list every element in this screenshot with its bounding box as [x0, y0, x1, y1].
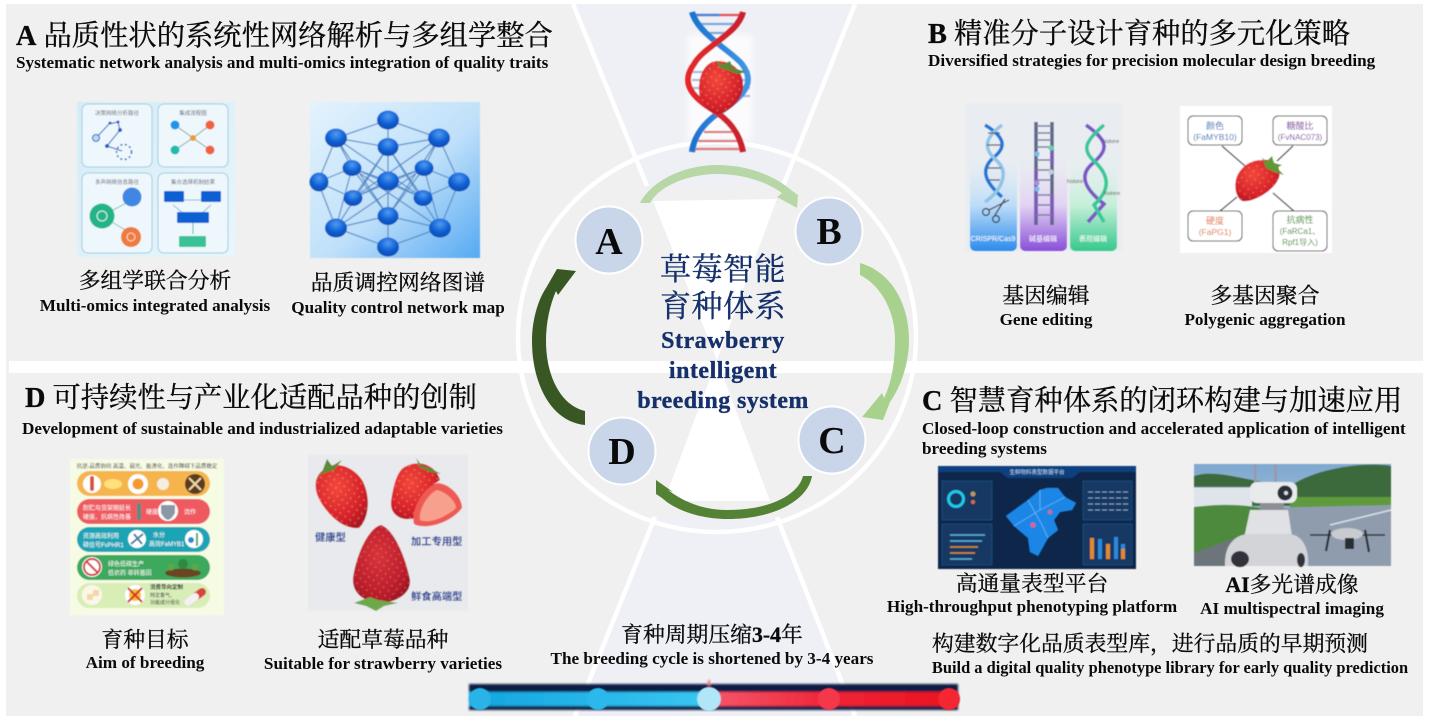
figure: polygenic aggregation: (FaMYB10) [1193, 132, 1237, 142]
node D: D [608, 431, 636, 473]
heading C: C 智慧育种体系的闭环构建与加速应用 [922, 385, 1402, 417]
node B [796, 198, 862, 264]
heading C [922, 385, 1406, 458]
panel D: sustainable varieties [22, 382, 503, 673]
heading B: B 精准分子设计育种的多元化策略 [928, 18, 1350, 50]
caption: gene editing [1000, 284, 1093, 329]
figure: gene editing: histone [1104, 191, 1120, 197]
figure: gene editing: histone [1067, 179, 1083, 185]
figure: strawberry varieties: 健康型 [315, 531, 346, 544]
figure: breeding aims: 抗逆-品质协同 高温、弱光、盐渍化、连作障碍下品质稳定 [77, 462, 218, 470]
caption: network map: Quality control network map [291, 298, 505, 317]
caption: gene editing: Gene editing [1000, 310, 1093, 329]
figure: strawberry varieties [308, 455, 468, 611]
caption: phenotyping platform: High-throughput phenotyping platform [887, 597, 1177, 616]
figure: breeding aims: 耐贮与货架期延长 [83, 504, 131, 512]
figure: polygenic aggregation: (FvNAC073) [1278, 133, 1323, 142]
text: digital phenotype library [932, 632, 1408, 677]
caption: AI imaging: AI多光谱成像 [1225, 573, 1359, 597]
node B: B [816, 211, 842, 253]
figure: breeding aims: 高效FaMYB1 [149, 540, 185, 548]
figure: breeding aims [70, 459, 224, 615]
heading C: breeding systems [922, 439, 1047, 458]
caption: network map: 品质调控网络图谱 [311, 271, 485, 295]
caption: polygenic aggregation: Polygenic aggregation [1184, 310, 1346, 329]
figure: strawberry varieties: 加工专用型 [411, 535, 462, 548]
figure: gene editing: 碱基编辑 [1029, 234, 1057, 243]
figure: gene editing: histone [1103, 139, 1119, 145]
heading B [928, 18, 1376, 70]
heading D: D 可持续性与产业化适配品种的创制 [25, 382, 477, 414]
figure: phenotyping dashboard: 生鲜物料表型数据平台 [1009, 468, 1065, 476]
figure: strawberry varieties: 鲜食高端型 [411, 590, 462, 603]
heading D: Development of sustainable and industrialized adaptable varieties [22, 419, 503, 438]
arrow: A to B [640, 165, 798, 208]
heading B: Diversified strategies for precision molecular design breeding [928, 51, 1376, 70]
panel C: closed-loop smart breeding [887, 385, 1408, 677]
heading A: Systematic network analysis and multi-omics integration of quality traits [16, 53, 549, 72]
center title: Strawberry [661, 328, 785, 354]
figure: phenotyping dashboard [938, 466, 1136, 569]
figure: gene editing [965, 103, 1122, 251]
arrow: B to C [860, 263, 909, 420]
center title: 草莓智能 [660, 252, 786, 287]
caption: AI imaging [1200, 573, 1384, 618]
text: breeding cycle: The breeding cycle is shortened by 3-4 years [551, 649, 874, 668]
figure: multi-omics panels [77, 102, 235, 257]
figure: breeding aims: 消费导向定制 [150, 583, 184, 591]
text: digital phenotype library: 构建数字化品质表型库，进行品质的早期预测 [932, 632, 1368, 657]
figure: breeding aims: 特定香气、 [150, 592, 175, 599]
figure: multi-omics panels: 决策网络分析路径 [95, 109, 139, 117]
caption: suitable varieties [264, 628, 502, 673]
center title [637, 252, 809, 414]
heading D [22, 382, 503, 438]
node C [798, 406, 866, 474]
figure: gene editing: CRISPR/Cas9 [971, 236, 1015, 243]
center title: 育种体系 [660, 289, 786, 324]
caption: suitable varieties: 适配草莓品种 [318, 628, 449, 652]
node A [576, 206, 642, 274]
node C: C [818, 420, 846, 462]
figure: breeding aims: 磷信号FvPHR1 [83, 541, 124, 549]
panel A: systematic network analysis [16, 20, 553, 317]
caption: aim of breeding [86, 628, 205, 672]
arrow: C to D [656, 476, 812, 519]
caption: AI imaging: AI multispectral imaging [1200, 599, 1384, 618]
figure: polygenic aggregation: (FaPG1) [1199, 227, 1231, 237]
figure: multi-omics panels: 多声网络信息路径 [95, 178, 139, 186]
figure: polygenic aggregation: 颜色 [1206, 120, 1224, 131]
figure: polygenic aggregation: 硬度 [1206, 215, 1224, 226]
arrow: D to A [532, 269, 585, 425]
center title: breeding system [637, 388, 809, 414]
figure: breeding aims: 低农药 非转基因 [108, 569, 152, 577]
progress bar: breeding timeline [469, 680, 960, 711]
center title: intelligent [669, 358, 777, 384]
figure: polygenic aggregation: 抗病性 [1286, 214, 1314, 225]
figure: polygenic aggregation: Rpf1导入) [1282, 238, 1318, 247]
caption: network map [291, 271, 505, 317]
figure: breeding aims: 绿色低碳生产 [108, 560, 144, 568]
figure: breeding aims: 硬度 [146, 508, 158, 516]
caption: multi-omics: Multi-omics integrated analysis [40, 296, 271, 315]
icon: DNA helix with strawberry [688, 12, 752, 152]
caption: gene editing: 基因编辑 [1002, 284, 1090, 308]
figure: multi-omics panels: 集合选择机制结果 [171, 178, 215, 186]
heading A [16, 20, 553, 72]
heading A: A 品质性状的系统性网络解析与多组学整合 [16, 20, 553, 52]
figure: AI multispectral robot [1194, 464, 1391, 567]
figure: breeding aims: 流作 [184, 508, 196, 516]
node A: A [595, 221, 623, 263]
caption: aim of breeding: 育种目标 [101, 628, 190, 652]
caption: multi-omics: 多组学联合分析 [79, 269, 231, 293]
figure: polygenic aggregation: 糖酸比 [1286, 120, 1314, 131]
text: breeding cycle: 育种周期压缩3-4年 [621, 623, 803, 647]
caption: aim of breeding: Aim of breeding [86, 653, 205, 672]
figure: breeding aims: 硬度、抗病性改善 [83, 513, 131, 521]
figure: polygenic aggregation [1180, 106, 1332, 253]
caption: phenotyping platform [887, 572, 1177, 616]
figure: multi-omics panels: 集成流程图 [179, 109, 207, 117]
figure: polygenic aggregation: (FaRCa1、 [1280, 227, 1320, 236]
caption: phenotyping platform: 高通量表型平台 [956, 572, 1108, 596]
text: breeding cycle [551, 623, 874, 668]
figure: breeding aims: 功能成分强化 [150, 599, 180, 606]
text: digital phenotype library: Build a digital quality phenotype library for early quality prediction [932, 658, 1408, 677]
panel B: molecular design breeding [928, 18, 1376, 329]
heading C: Closed-loop construction and accelerated application of intelligent [922, 419, 1406, 438]
figure: gene editing: 表观编辑 [1079, 234, 1107, 243]
node D [588, 418, 656, 484]
caption: multi-omics [40, 269, 271, 315]
caption: polygenic aggregation [1184, 284, 1346, 329]
figure: breeding aims: 水分 [153, 531, 165, 539]
figure: breeding aims: 资源高效利用 [83, 532, 119, 540]
caption: polygenic aggregation: 多基因聚合 [1210, 284, 1320, 308]
caption: suitable varieties: Suitable for strawberry varieties [264, 654, 502, 673]
figure: quality network map [310, 102, 480, 258]
